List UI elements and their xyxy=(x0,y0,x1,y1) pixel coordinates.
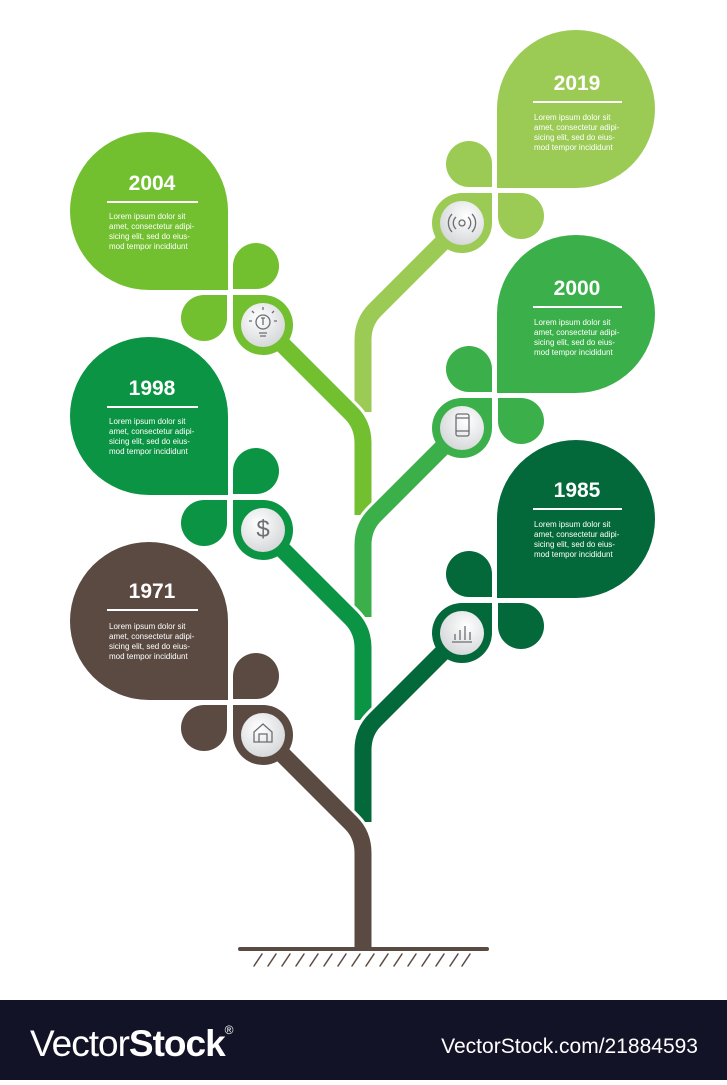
text: 2019: amet, consectetur adipi- xyxy=(534,123,620,132)
texts xyxy=(107,72,622,661)
text: 1985: Lorem ipsum dolor sit xyxy=(534,520,611,529)
text: 1998: amet, consectetur adipi- xyxy=(109,427,195,436)
text: 1985: amet, consectetur adipi- xyxy=(534,530,620,539)
icons xyxy=(249,214,476,742)
text: 2019: mod tempor incididunt xyxy=(534,143,613,152)
text: 2000: Lorem ipsum dolor sit xyxy=(534,318,611,327)
branch: 1998 xyxy=(263,530,363,720)
text: 1971 xyxy=(107,580,198,661)
text: 1985: mod tempor incididunt xyxy=(534,550,613,559)
branch: 2004 xyxy=(263,325,363,515)
text: 2019 xyxy=(533,72,622,152)
ground xyxy=(240,949,487,966)
text: 1971: 1971 xyxy=(129,580,176,603)
text: 2000: mod tempor incididunt xyxy=(534,348,613,357)
footer: ® xyxy=(225,1023,234,1037)
text: 1971: Lorem ipsum dolor sit xyxy=(109,622,186,631)
text: 1998: Lorem ipsum dolor sit xyxy=(109,417,186,426)
branches xyxy=(263,223,462,950)
text: 1998 xyxy=(107,377,198,456)
branch: 2019 xyxy=(363,223,462,412)
branch: 2000 xyxy=(363,428,462,617)
text: 2000 xyxy=(533,277,622,357)
text: 2004: amet, consectetur adipi- xyxy=(109,222,195,231)
icon: house xyxy=(254,724,272,742)
text: 1998: 1998 xyxy=(129,377,176,400)
text: 2019: 2019 xyxy=(554,72,600,95)
text: 1971: amet, consectetur adipi- xyxy=(109,632,195,641)
icon: dollar: $ xyxy=(256,516,270,543)
text: 1985: sicing elit, sed do eius- xyxy=(534,540,615,549)
text: 1985: 1985 xyxy=(554,479,601,502)
cluster: 1985 xyxy=(432,440,655,663)
footer: VectorStock xyxy=(30,1023,225,1064)
cluster: 1971 xyxy=(70,542,293,765)
text: 2000: sicing elit, sed do eius- xyxy=(534,338,615,347)
footer: VectorStock.com/21884593 xyxy=(441,1035,698,1058)
text: 2004: sicing elit, sed do eius- xyxy=(109,232,190,241)
cluster: 2019 xyxy=(432,30,655,253)
text: 2004: 2004 xyxy=(129,172,176,195)
cluster: 2004 xyxy=(70,132,293,355)
text: 2004: Lorem ipsum dolor sit xyxy=(109,212,186,221)
text: 2000: 2000 xyxy=(554,277,600,300)
text: 1985 xyxy=(533,479,622,559)
text: 1998: sicing elit, sed do eius- xyxy=(109,437,190,446)
text: 1971: mod tempor incididunt xyxy=(109,652,188,661)
text: 1998: mod tempor incididunt xyxy=(109,447,188,456)
text: 2004: mod tempor incididunt xyxy=(109,242,188,251)
icon: phone xyxy=(456,414,469,436)
footer xyxy=(0,1000,727,1080)
text: 2000: amet, consectetur adipi- xyxy=(534,328,620,337)
trunk xyxy=(263,735,363,950)
cluster: 1998 xyxy=(70,337,293,560)
text: 2004 xyxy=(107,172,198,251)
icon: chart xyxy=(452,626,472,642)
text: 1971: sicing elit, sed do eius- xyxy=(109,642,190,651)
icon: wireless xyxy=(448,214,476,232)
cluster: 2000 xyxy=(432,235,655,458)
branch: 1985 xyxy=(363,633,462,822)
icon: lightbulb xyxy=(249,307,277,336)
text: 2019: sicing elit, sed do eius- xyxy=(534,133,615,142)
text: 2019: Lorem ipsum dolor sit xyxy=(534,113,611,122)
